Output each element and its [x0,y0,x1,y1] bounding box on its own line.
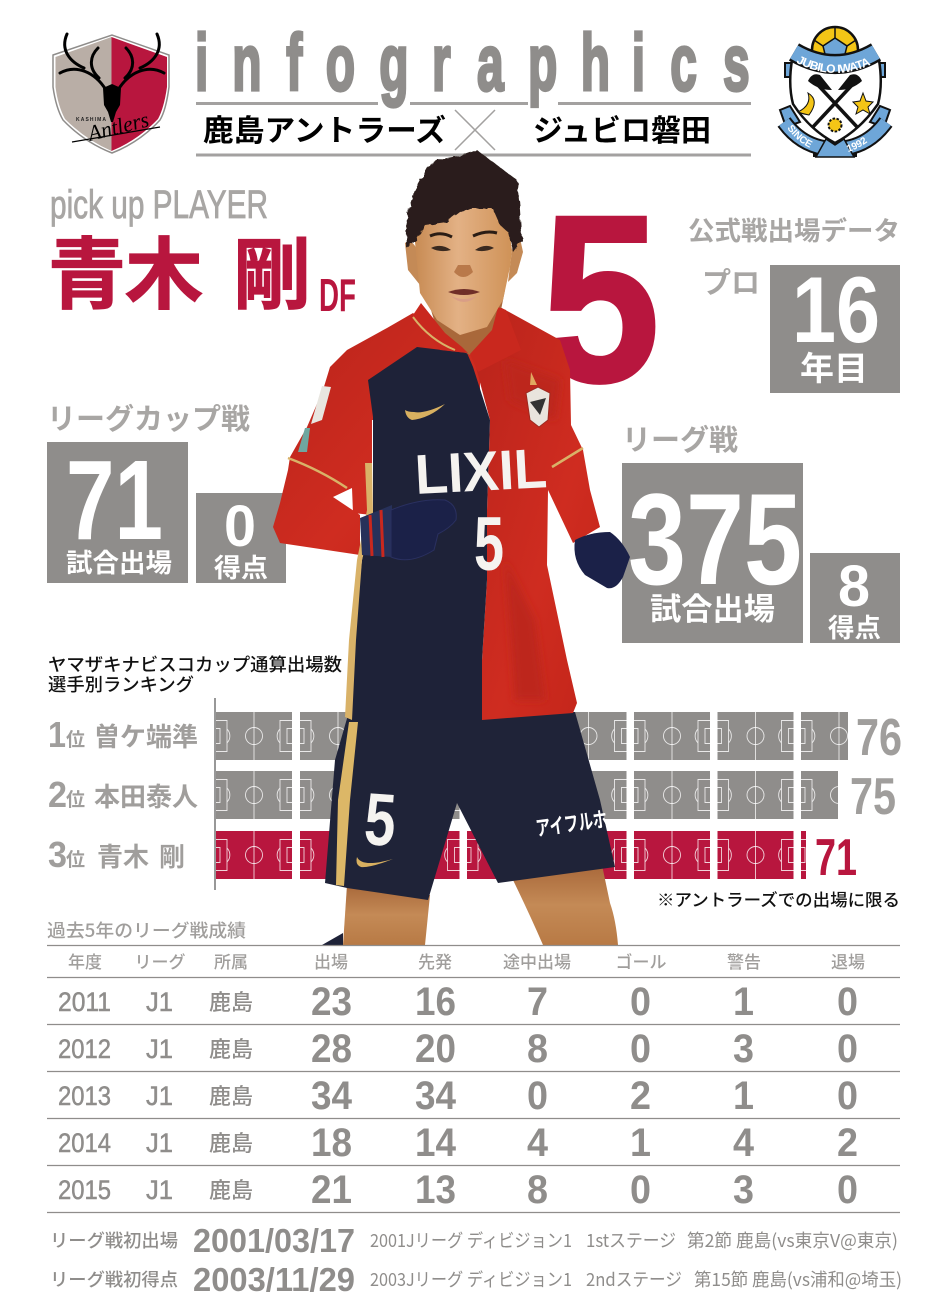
rank 3 label: 青木剛 [97,837,185,874]
rank 1 label [48,714,198,755]
subheading: pick up PLAYER: pick up PLAYER [50,183,268,227]
table header: ゴール [616,952,666,972]
shirt number: 5 [474,502,504,587]
shirt folds [505,360,560,700]
logo: Kashima Antlers crest: KASHIMA [76,117,106,123]
ranking heading: 選手別ランキング [48,671,194,697]
table row 2012: J1 [146,1034,173,1064]
logo: Jubilo Iwata crest [778,26,892,158]
match title: home team: 鹿島アントラーズ [203,106,446,150]
table header [68,952,865,972]
logo: Kashima Antlers crest: Antlers [83,107,151,146]
stat box: pro years [770,257,900,393]
rank 1 label: 曽ケ端準 [94,717,198,754]
table row 2014: J1 [146,1128,173,1158]
table header: 年度 [68,953,102,972]
table row 2013: 1 [733,1074,754,1118]
title rules [196,104,751,155]
rank 3 label [48,834,185,875]
right glove [574,532,630,588]
logo: Kashima Antlers crest [53,34,169,153]
logo: Jubilo Iwata crest: 1992 [846,137,868,152]
heading: official match data: 公式戦出場データ [688,211,900,248]
rank 3 label: 3 [48,834,67,875]
table row 2012: 鹿島 [209,1032,253,1064]
match title: cross mark [455,110,495,150]
table row 2013: 0 [837,1074,858,1118]
left glove [360,500,456,560]
first league appearance: 2001/03/17 [193,1222,355,1259]
rank 2 label: 位 [66,785,85,812]
table row 2012: 20 [415,1027,456,1071]
stat box: league goals: 得点 [828,608,881,645]
ranking heading [48,651,342,697]
first league appearance: リーグ戦初出場 [50,1227,178,1253]
table row 2011: 2011 [58,987,111,1017]
shorts: 5 [362,777,399,862]
label: pro: プロ [702,260,760,302]
table row 2015: 2015 [58,1175,111,1205]
ranking heading: ヤマザキナビスコカップ通算出場数 [48,651,342,677]
table row 2012: 2012 [58,1034,111,1064]
stat box: league cup appearances: 試合出場 [66,543,172,580]
table header: 先発 [418,953,452,972]
first league goal [50,1261,902,1298]
logo: Jubilo Iwata crest: SINCE [788,125,813,148]
table row 2012: 8 [527,1027,548,1071]
rank 3 bar [216,831,806,879]
table header: 途中出場 [503,953,571,972]
heading: league: リーグ戦 [622,417,738,459]
ranking: axis line [214,698,216,890]
stat box: league goals [810,553,900,645]
sponsor: LIXIL: LIXIL [413,436,548,506]
shirt navy half [348,347,490,720]
table row 2011: 0 [630,980,651,1024]
first league appearance [50,1222,898,1259]
table row 2013: 34 [311,1074,353,1118]
table row 2015: 8 [527,1168,548,1212]
shorts: アイフルホ [534,803,609,843]
title: infographics: infographics [195,17,750,107]
crest on shirt [526,372,550,427]
table row 2014: 4 [527,1121,549,1165]
table row 2015: 21 [311,1168,352,1212]
table row 2014: 鹿島 [209,1126,253,1158]
first league appearance: 第2節 鹿島(vs東京V@東京) [687,1227,898,1253]
table row 2013: 34 [415,1074,457,1118]
rank 1 value: 76 [856,709,902,767]
player photo illustration [273,150,630,945]
table heading: 過去5年のリーグ戦成績 [47,917,246,943]
ranking footnote: ※アントラーズでの出場に限る [657,886,900,911]
table row 2012: 0 [630,1027,651,1071]
stat box: league cup goals: 0 [224,494,256,559]
table header: 退場 [831,953,865,972]
table row 2012: 0 [837,1027,858,1071]
back foot [322,933,343,945]
hair [406,150,522,252]
table row 2013: 0 [527,1074,548,1118]
stat box: league appearances: 375 [628,466,802,612]
right leg [513,865,618,945]
rank 2 label [48,774,198,815]
rank 1 bar [216,712,877,760]
table header: 出場 [314,953,348,972]
table row 2015 [58,1168,858,1212]
table row 2015: 3 [733,1168,754,1212]
table row 2015: 0 [630,1168,651,1212]
table row 2013: 2013 [58,1081,111,1111]
side stripe [345,463,373,720]
table row 2015: 0 [837,1168,858,1212]
stat box: pro years: 年目 [800,342,868,390]
table header: リーグ [134,953,186,972]
stat box: league cup appearances: 71 [66,437,163,563]
table row 2013: J1 [146,1081,173,1111]
rank 1 label: 1 [48,714,66,755]
first league appearance: 1stステージ [586,1227,676,1253]
table row 2014: 18 [311,1121,352,1165]
table row 2013 [58,1074,858,1118]
table row 2014: 14 [415,1121,457,1165]
sleeve cuff stripes [288,448,583,488]
shirt number: 5 [541,167,660,432]
table row 2011: 7 [527,980,548,1024]
collar [413,303,521,372]
table rules [47,946,900,1212]
table row 2014: 2 [837,1121,858,1165]
table row 2011: 鹿島 [209,985,253,1017]
face [405,185,523,335]
table row 2012: 3 [733,1027,754,1071]
heading: league cup: リーグカップ戦 [47,396,250,438]
table row 2015: J1 [146,1175,173,1205]
table row 2014 [58,1121,858,1165]
chest logo [405,404,445,420]
table row 2014: 2014 [58,1128,111,1158]
rank 2 label: 本田泰人 [94,777,198,814]
stat box: league goals: 8 [838,554,870,619]
table row 2014: 1 [630,1121,651,1165]
rank 2 bar [216,771,877,819]
table header: 警告 [727,953,761,972]
rank 1 label: 位 [66,725,85,752]
table row 2011: 23 [311,980,352,1024]
shirt red base and left sleeve [273,313,480,555]
rank 3 label: 位 [66,845,85,872]
shirt red right half [470,307,600,720]
rank 2 value: 75 [850,768,896,826]
stat box: league cup goals: 得点 [214,548,268,585]
rank 3 value: 71 [815,829,857,887]
sleeve patches [311,386,331,424]
first league goal: リーグ戦初得点 [50,1266,178,1292]
table row 2014: 4 [733,1121,755,1165]
table row 2012: 28 [311,1027,352,1071]
table row 2011: J1 [146,987,173,1017]
shorts [325,712,615,900]
table row 2015: 13 [415,1168,456,1212]
first league goal: 2ndステージ [586,1266,682,1292]
position: DF: DF [319,269,356,321]
first league goal: 2003/11/29 [193,1261,355,1298]
first league goal: 2003Jリーグ ディビジョン1 [370,1266,572,1292]
player name: 青木剛 [48,213,311,325]
table row 2011: 16 [415,980,456,1024]
stat box: pro years: 16 [792,257,880,362]
stat box: league cup goals [196,493,286,585]
table header: 所属 [214,953,248,972]
match title: away team: ジュビロ磐田 [533,106,711,150]
table row 2011: 0 [837,980,858,1024]
first league goal: 第15節 鹿島(vs浦和@埼玉) [694,1266,902,1292]
logo: Jubilo Iwata crest: JUBILO IWATA [796,56,870,73]
rank 2 label: 2 [48,774,67,815]
left leg [343,885,430,945]
table row 2013: 2 [630,1074,651,1118]
first league appearance: 2001Jリーグ ディビジョン1 [370,1227,572,1253]
table row 2012 [58,1027,858,1071]
table row 2015: 鹿島 [209,1173,253,1205]
table row 2011: 1 [733,980,754,1024]
stat box: league appearances: 試合出場 [650,584,775,629]
table row 2011 [58,980,858,1024]
neck [425,290,505,355]
stat box: league appearances [622,463,803,643]
table row 2013: 鹿島 [209,1079,253,1111]
